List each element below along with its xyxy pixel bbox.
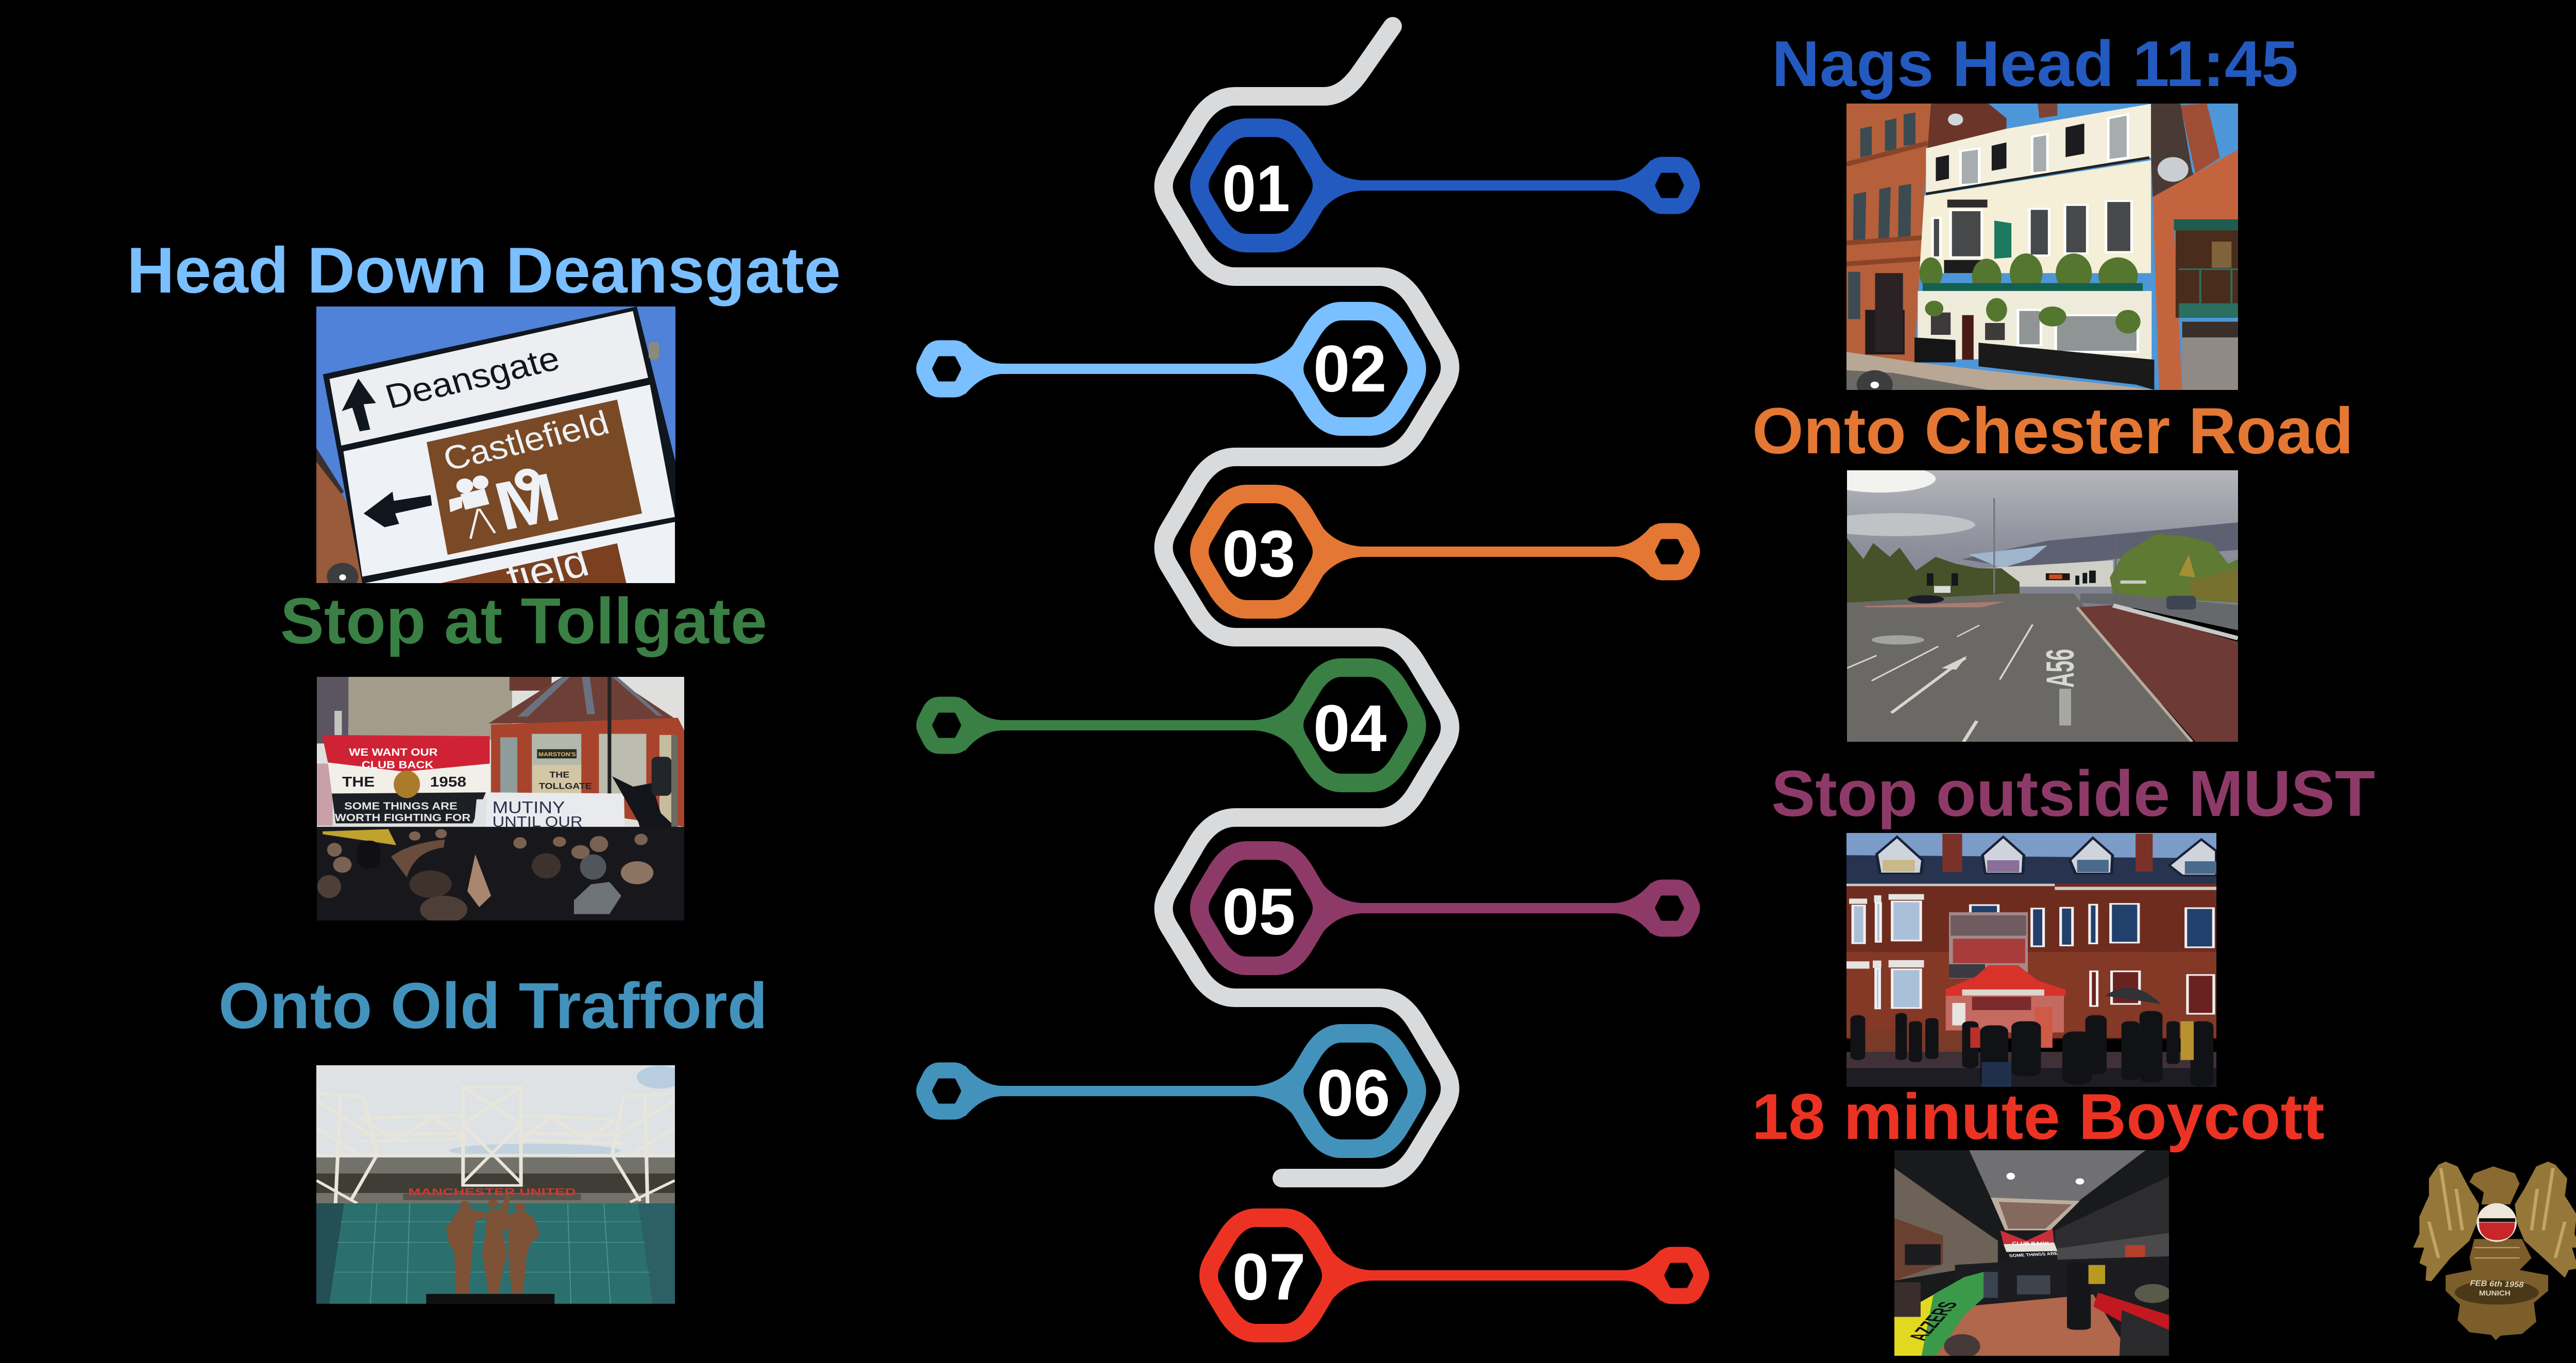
callout 05: numbered hexagon with stem bbox=[1199, 850, 1692, 966]
callout 03: numbered hexagon with stem: 03 bbox=[1222, 517, 1295, 591]
callout 06: numbered hexagon with stem: 06 bbox=[1317, 1057, 1390, 1130]
photo: Tollgate protest: FOOTBALL bbox=[493, 827, 575, 843]
photo: Deansgate road sign: Deansgate bbox=[381, 339, 564, 416]
photo: Tollgate protest: TOLLGATE bbox=[539, 781, 592, 791]
photo: Deansgate road sign: field bbox=[501, 538, 594, 601]
photo: Tollgate protest bbox=[317, 677, 684, 921]
heading: Onto Old Trafford: Onto Old Trafford bbox=[218, 969, 768, 1042]
photo: Deansgate road sign: Castlefield bbox=[439, 404, 614, 478]
callout 07: numbered hexagon with stem bbox=[1209, 1218, 1701, 1333]
heading: 18 minute Boycott: 18 minute Boycott bbox=[1752, 1080, 2325, 1153]
callout 03: numbered hexagon with stem bbox=[1199, 494, 1692, 609]
heading: Nags Head 11:45: Nags Head 11:45 bbox=[1772, 27, 2298, 100]
photo: boycott crowd in tunnel bbox=[1894, 1150, 2169, 1356]
photo: Deansgate road sign bbox=[316, 306, 675, 601]
photo: MUST shop terrace bbox=[1846, 833, 2216, 1087]
callout 06: numbered hexagon with stem bbox=[924, 1033, 1417, 1149]
callout 05: numbered hexagon with stem: 05 bbox=[1222, 875, 1295, 949]
photo: Tollgate protest: THE bbox=[342, 774, 375, 790]
emblem: Munich 1958 eagle badge: MUNICH bbox=[2479, 1290, 2511, 1298]
heading: Stop outside MUST: Stop outside MUST bbox=[1771, 757, 2375, 830]
photo: Tollgate protest: THE bbox=[549, 770, 569, 779]
photo: Chester Road bbox=[1847, 470, 2238, 742]
heading: Head Down Deansgate: Head Down Deansgate bbox=[127, 234, 841, 306]
photo: Old Trafford stadium bbox=[316, 1065, 675, 1304]
photo: Tollgate protest: UNTIL OUR bbox=[493, 813, 583, 830]
photo: boycott crowd in tunnel: AZZERS bbox=[1902, 1300, 1963, 1342]
photo: Old Trafford stadium: MANCHESTER UNITED bbox=[408, 1186, 576, 1198]
photo: Tollgate protest: WORTH FIGHTING FOR bbox=[335, 811, 470, 824]
emblem: Munich 1958 eagle badge: FEB 6th 1958 bbox=[2469, 1279, 2525, 1289]
photo: Tollgate protest: MARSTON'S bbox=[538, 752, 576, 758]
callout 02: numbered hexagon with stem: 02 bbox=[1313, 332, 1386, 406]
route line: grey winding path bbox=[1163, 26, 1450, 1178]
callout 04: numbered hexagon with stem: 04 bbox=[1313, 692, 1386, 765]
callout 04: numbered hexagon with stem bbox=[924, 668, 1417, 783]
heading: Stop at Tollgate: Stop at Tollgate bbox=[280, 585, 767, 657]
photo: Deansgate road sign: M bbox=[487, 458, 567, 545]
photo: Chester Road: A56 bbox=[2039, 649, 2083, 688]
emblem: Munich 1958 eagle badge bbox=[2413, 1162, 2576, 1340]
callout 02: numbered hexagon with stem bbox=[924, 311, 1417, 427]
photo: Tollgate protest: WE WANT OUR bbox=[349, 746, 438, 758]
photo: Tollgate protest: SOME THINGS ARE bbox=[344, 800, 457, 812]
photo: Nags Head pub bbox=[1846, 104, 2238, 390]
photo: boycott crowd in tunnel: SOME THINGS ARE bbox=[2008, 1251, 2059, 1258]
callout 01: numbered hexagon with stem bbox=[1199, 128, 1692, 243]
photo: boycott crowd in tunnel: CLUB BACK bbox=[2012, 1241, 2049, 1247]
photo: Tollgate protest: MUTINY bbox=[493, 798, 565, 817]
callout 01: numbered hexagon with stem: 01 bbox=[1222, 152, 1290, 226]
heading: Onto Chester Road: Onto Chester Road bbox=[1752, 394, 2353, 467]
photo: Tollgate protest: 1958 bbox=[430, 774, 466, 790]
callout 07: numbered hexagon with stem: 07 bbox=[1232, 1240, 1306, 1314]
photo: Tollgate protest: CLUB BACK bbox=[362, 759, 434, 771]
